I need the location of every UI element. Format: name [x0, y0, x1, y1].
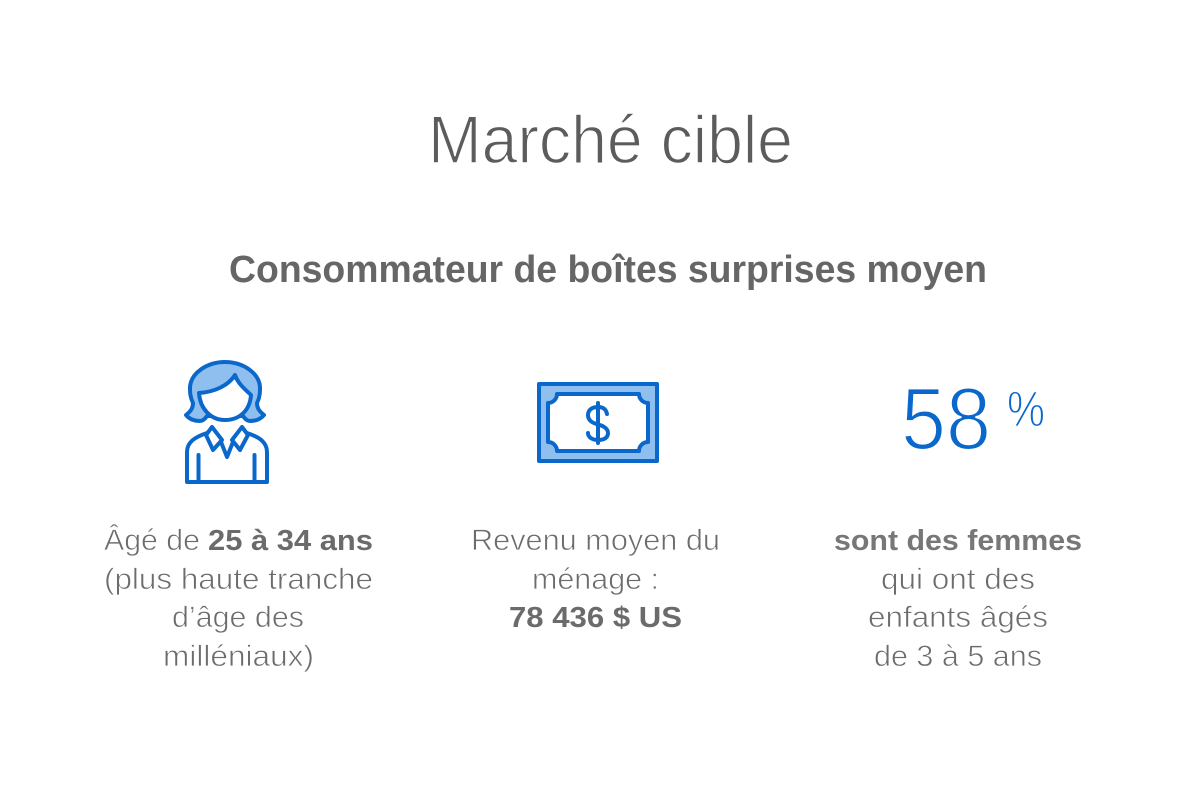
text: income: 78 436 $ US [509, 602, 682, 634]
text: women: sont des femmes [834, 525, 1082, 557]
text: women: de 3 à 5 ans [874, 640, 1042, 673]
text: age: Âgé de [104, 524, 200, 557]
icon: woman [186, 362, 267, 482]
text: women: enfants âgés [868, 601, 1048, 634]
text: age: (plus haute tranche [104, 563, 373, 596]
text: income: Revenu moyen du [471, 524, 720, 557]
text: income: ménage : [532, 563, 659, 596]
icon: banknote [539, 384, 657, 461]
stat: 58 percent: 58 [901, 369, 991, 468]
text: women: qui ont des [881, 563, 1035, 596]
stat: 58 percent [901, 369, 1045, 468]
text: income [471, 524, 720, 634]
text: women [834, 525, 1082, 673]
stat: 58 percent: % [1007, 381, 1045, 437]
text: age: 25 à 34 ans [208, 525, 373, 557]
text: age [104, 524, 373, 673]
subtitle: Consommateur de boîtes surprises moyen [229, 249, 987, 291]
column: women [834, 369, 1082, 673]
column: age [104, 362, 373, 673]
text: age: milléniaux) [163, 640, 314, 673]
text: age: d’âge des [172, 601, 304, 634]
column: income [471, 384, 720, 634]
title: Marché cible [428, 102, 793, 178]
